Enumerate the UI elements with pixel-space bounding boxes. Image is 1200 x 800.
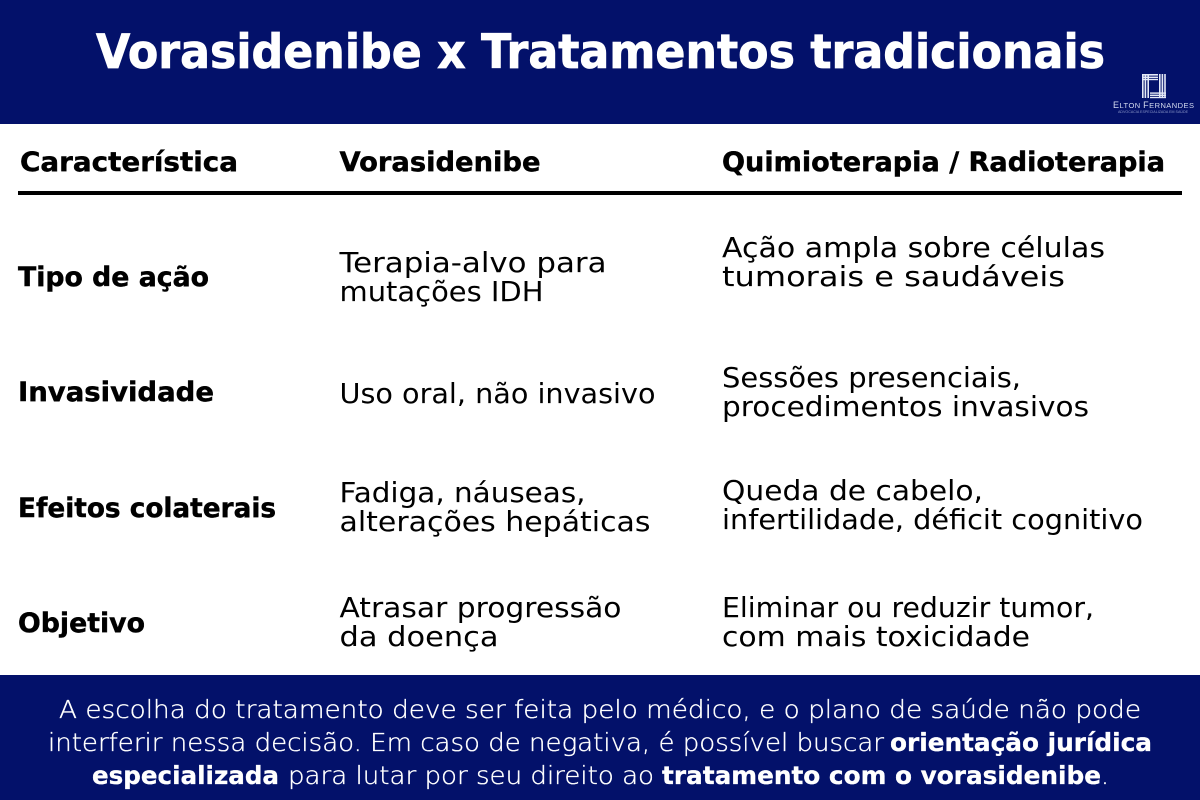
panel: footer note: tratamento com o vorasidenibe	[662, 761, 1101, 790]
table column headers: Quimioterapia / Radioterapia	[722, 147, 1165, 178]
row: Tipo de ação: Tipo de ação	[18, 262, 209, 293]
row: Invasividade: procedimentos invasivos	[722, 390, 1089, 423]
row: Efeitos colaterais: alterações hepáticas	[340, 505, 650, 538]
panel: footer note: A escolha do tratamento deve ser feita pelo médico, e o plano de saúde não pode	[59, 695, 1141, 724]
row: Objetivo: Atrasar progressão	[340, 591, 622, 624]
row: Invasividade: Uso oral, não invasivo	[340, 377, 656, 410]
row: Efeitos colaterais: Fadiga, náuseas,	[340, 476, 586, 509]
table column headers	[20, 147, 1165, 178]
row: Objetivo: Eliminar ou reduzir tumor,	[722, 591, 1094, 624]
row: Objetivo: com mais toxicidade	[722, 620, 1030, 653]
panel: header banner	[0, 0, 1200, 124]
row: Invasividade: Sessões presenciais,	[722, 361, 1021, 394]
row: Efeitos colaterais	[18, 474, 1143, 538]
row: Tipo de ação: tumorais e saudáveis	[722, 260, 1065, 293]
table column headers: Característica	[20, 147, 238, 178]
row: Objetivo: da doença	[340, 620, 498, 653]
panel: footer note	[0, 675, 1200, 800]
row: Tipo de ação: Terapia-alvo para	[338, 246, 606, 279]
row: Efeitos colaterais: Efeitos colaterais	[18, 493, 276, 524]
logo: Elton Fernandes	[1113, 74, 1194, 114]
panel: footer note: .	[1101, 761, 1109, 790]
panel: footer note: para lutar por seu direito ao	[288, 761, 654, 790]
row: Objetivo: Objetivo	[18, 608, 145, 639]
panel: footer note: interferir nessa decisão. Em caso de negativa, é possível buscar	[48, 728, 885, 757]
row: Tipo de ação: Ação ampla sobre células	[722, 231, 1105, 264]
row: Invasividade	[18, 361, 1089, 423]
logo: Elton Fernandes: ELTON FERNANDES	[1113, 100, 1194, 110]
panel: footer note: orientação jurídica	[890, 728, 1152, 757]
row: Objetivo	[18, 591, 1094, 653]
row: Invasividade: Invasividade	[18, 377, 214, 408]
title: Vorasidenibe x Tratamentos tradicionais	[96, 25, 1105, 80]
row: Efeitos colaterais: Queda de cabelo,	[722, 474, 983, 507]
row: Tipo de ação: mutações IDH	[340, 275, 544, 308]
logo: Elton Fernandes: ADVOCACIA ESPECIALIZADA EM SAÚDE	[1118, 110, 1189, 114]
table column headers: Vorasidenibe	[340, 147, 540, 178]
row: Tipo de ação	[18, 231, 1105, 308]
panel: footer note: especializada	[92, 761, 279, 790]
row: Efeitos colaterais: infertilidade, déficit cognitivo	[722, 503, 1143, 536]
